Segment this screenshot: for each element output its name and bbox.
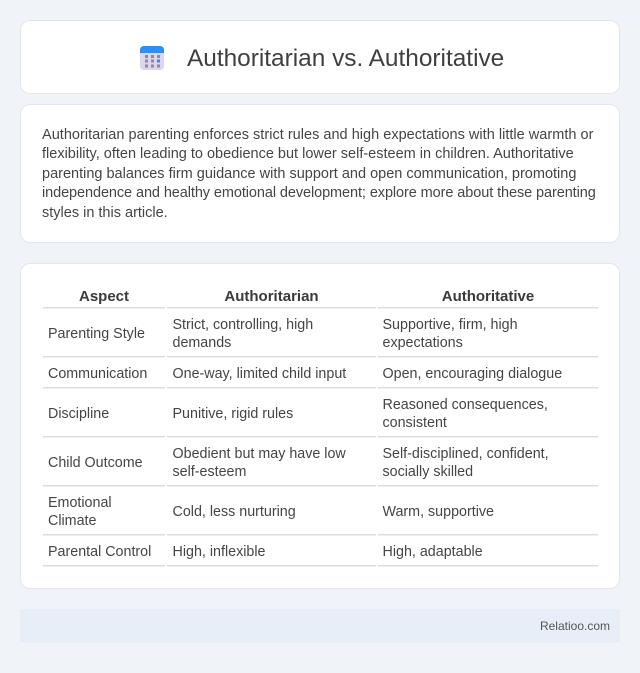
row: parenting style: demands bbox=[172, 335, 231, 351]
title card bbox=[20, 20, 620, 94]
row: child outcome bbox=[48, 446, 549, 480]
row: discipline: consistent bbox=[382, 415, 447, 431]
table headers: Authoritative bbox=[442, 288, 534, 305]
panel: intro text bbox=[20, 104, 620, 243]
row: child outcome: socially skilled bbox=[382, 464, 473, 480]
row: parenting style bbox=[48, 317, 518, 351]
row: child outcome: self-esteem bbox=[172, 464, 246, 480]
table headers: Authoritarian bbox=[224, 288, 319, 305]
row: emotional climate: Warm, supportive bbox=[382, 504, 494, 520]
row: communication bbox=[48, 366, 562, 382]
row: parental control: High, inflexible bbox=[172, 544, 265, 560]
row: parenting style: Supportive, firm, high bbox=[382, 317, 518, 333]
row: child outcome: Obedient but may have low bbox=[172, 446, 346, 462]
table headers: Aspect bbox=[79, 288, 129, 305]
row: emotional climate: Climate bbox=[48, 513, 96, 529]
row: discipline: Discipline bbox=[48, 406, 109, 422]
panel: intro text: parenting balances firm guidance with support and open communication, promoting bbox=[42, 166, 576, 182]
row: emotional climate: Emotional bbox=[48, 495, 112, 511]
panel: intro text: styles in this article. bbox=[42, 205, 168, 221]
row: parental control: Parental Control bbox=[48, 544, 151, 560]
footer bar bbox=[20, 609, 620, 643]
panel: intro text: independence and healthy emotional development; explore more about these parenting bbox=[42, 185, 596, 201]
panel: intro text: flexibility, often leading to obedience but lower self-esteem in children. Authoritative bbox=[42, 146, 574, 162]
row: parental control bbox=[48, 544, 483, 560]
table headers bbox=[79, 288, 534, 305]
row: communication: Open, encouraging dialogue bbox=[382, 366, 562, 382]
row: parenting style: Strict, controlling, high bbox=[172, 317, 313, 333]
row: emotional climate: Cold, less nurturing bbox=[172, 504, 296, 520]
panel: intro text: Authoritarian parenting enforces strict rules and high expectations with little warmth or bbox=[42, 127, 593, 143]
row: discipline: Reasoned consequences, bbox=[382, 397, 548, 413]
row: communication: One-way, limited child input bbox=[172, 366, 346, 382]
footer text: Relatioo.com bbox=[540, 619, 610, 633]
row: parenting style: Parenting Style bbox=[48, 326, 145, 342]
row: parental control: High, adaptable bbox=[382, 544, 483, 560]
row: discipline: Punitive, rigid rules bbox=[172, 406, 293, 422]
row: discipline bbox=[48, 397, 548, 431]
row: emotional climate bbox=[48, 495, 494, 529]
panel: comparison table bbox=[20, 263, 620, 589]
row: parenting style: expectations bbox=[382, 335, 463, 351]
row: child outcome: Child Outcome bbox=[48, 455, 143, 471]
title: Authoritarian vs. Authoritative bbox=[187, 45, 504, 72]
row: communication: Communication bbox=[48, 366, 147, 382]
row: child outcome: Self-disciplined, confident, bbox=[382, 446, 549, 462]
icon: calendar bbox=[140, 46, 164, 70]
